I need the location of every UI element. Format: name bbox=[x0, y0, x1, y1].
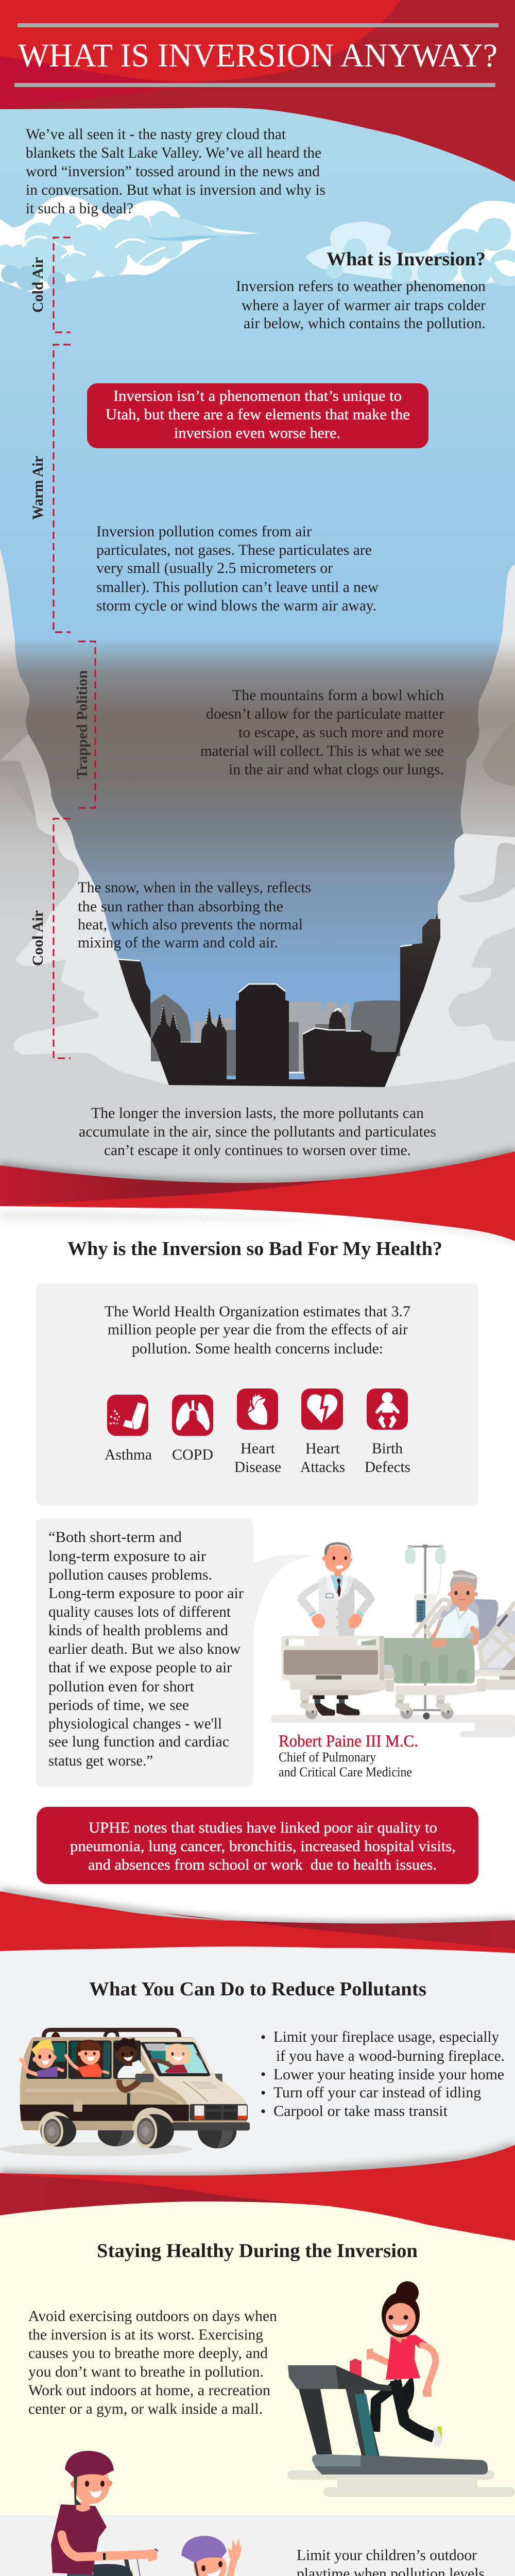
pollutants section background bbox=[0, 1942, 515, 2179]
distant light buildings bbox=[193, 1002, 350, 1073]
heading: what is inversion: What is Inversion? bbox=[327, 249, 486, 270]
panel: who estimate and health concerns: Defects bbox=[365, 1459, 410, 1476]
bracket: warm air bbox=[54, 345, 71, 632]
title bottom rule bbox=[14, 83, 495, 87]
panel: doctor quote: physiological changes - we'll bbox=[48, 1715, 222, 1732]
text: particulates: particulates, not gases. These particulates are bbox=[96, 541, 372, 558]
callout: unique to utah: Utah, but there are a few elements that make the bbox=[106, 406, 410, 423]
heading: why so bad: Why is the Inversion so Bad For My Health? bbox=[67, 1238, 442, 1260]
callout: uphe studies bbox=[37, 1807, 478, 1884]
label: cold air: Cold Air bbox=[29, 257, 46, 313]
intro text: blankets the Salt Lake Valley. We’ve all heard the bbox=[26, 144, 321, 161]
runner bbox=[401, 2375, 414, 2411]
text: children advice: Limit your children’s outdoor bbox=[297, 2547, 477, 2564]
text: particulates: storm cycle or wind blows the warm air away. bbox=[96, 597, 376, 614]
bullet list bbox=[261, 2028, 505, 2120]
son bbox=[181, 2536, 284, 2576]
bracket: cool air bbox=[54, 819, 71, 1058]
illustration: father and son on bicycles bbox=[0, 2451, 312, 2576]
text: exercise advice: Work out indoors at home, a recreation bbox=[28, 2382, 270, 2399]
text: particulates: smaller). This pollution can’t leave until a new bbox=[96, 579, 379, 596]
father bbox=[20, 2451, 178, 2576]
bullet list: Limit your fireplace usage, especially bbox=[273, 2028, 499, 2045]
panel: doctor quote: see lung function and cardiac bbox=[48, 1733, 229, 1750]
kid: brunette bbox=[66, 2040, 109, 2077]
inversion definition: air below, which contains the pollution. bbox=[244, 315, 486, 332]
illustration: family van bbox=[0, 2030, 250, 2156]
white health section background bbox=[0, 1195, 515, 1927]
windshield bbox=[140, 2042, 210, 2076]
label: warm air: Warm Air bbox=[29, 456, 46, 520]
text: exercise advice bbox=[28, 2308, 277, 2417]
bullet list: if you have a wood-burning fireplace. bbox=[276, 2047, 505, 2064]
text: mountains bowl: to escape, as such more and more bbox=[238, 724, 444, 741]
panel: who estimate and health concerns: Asthma bbox=[105, 1446, 152, 1463]
text: exercise advice: the inversion is at its worst. Exercising bbox=[28, 2326, 263, 2343]
intro text: in conversation. But what is inversion and why is bbox=[26, 181, 325, 198]
bracket: cold air bbox=[54, 238, 71, 332]
doctor name and title: Robert Paine III M.C. bbox=[279, 1732, 418, 1751]
panel: who estimate and health concerns: million people per year die from the effects of air bbox=[108, 1321, 408, 1338]
inversion definition bbox=[236, 278, 486, 332]
panel: doctor quote: Long-term exposure to poor air bbox=[48, 1585, 244, 1602]
driver bbox=[151, 2044, 203, 2073]
rear leg bbox=[375, 2383, 399, 2432]
red wave divider 3 bbox=[0, 2141, 515, 2241]
text: exercise advice: you don’t want to breathe in pollution. bbox=[28, 2363, 264, 2380]
cloud left bbox=[0, 195, 260, 293]
bullet list: Turn off your car instead of idling bbox=[273, 2084, 481, 2101]
icon: lungs bbox=[172, 1395, 213, 1436]
text: snow: mixing of the warm and cold air. bbox=[78, 934, 278, 951]
text: mountains bowl: doesn’t allow for the particulate matter bbox=[206, 705, 444, 722]
callout: uphe studies: UPHE notes that studies have linked poor air quality to bbox=[89, 1819, 437, 1836]
kid: blond bbox=[19, 2039, 64, 2077]
text: mountains bowl: The mountains form a bowl which bbox=[232, 687, 444, 704]
bed footboard and frame bbox=[282, 1636, 515, 1696]
header band bbox=[0, 0, 515, 185]
illustration: doctor and patient at bedside bbox=[271, 1542, 515, 1737]
panel: who estimate and health concerns: COPD bbox=[172, 1446, 213, 1463]
doctor bbox=[297, 1542, 375, 1716]
text: particulates: very small (usually 2.5 micrometers or bbox=[96, 560, 333, 577]
doctor name and title bbox=[279, 1732, 418, 1780]
text: exercise advice: Avoid exercising outdoors on days when bbox=[28, 2308, 277, 2325]
heading: staying healthy: Staying Healthy During the Inversion bbox=[97, 2240, 418, 2262]
floor bbox=[271, 1715, 515, 1737]
panel: doctor quote: earlier death. But we also know bbox=[48, 1640, 241, 1657]
staying healthy section background bbox=[0, 2179, 515, 2515]
mirrors bbox=[135, 2074, 154, 2082]
panel: who estimate and health concerns: Disease bbox=[234, 1459, 281, 1476]
callout: unique to utah bbox=[87, 383, 428, 448]
rear wheels bbox=[98, 2120, 134, 2146]
intro text: word “inversion” tossed around in the news and bbox=[26, 163, 320, 180]
panel: who estimate and health concerns: The World Health Organization estimates that 3.7 bbox=[105, 1303, 410, 1320]
intro text: We’ve all seen it - the nasty grey cloud that bbox=[26, 126, 286, 143]
roof rack bbox=[44, 2030, 179, 2037]
city skyline bbox=[118, 913, 440, 1087]
red wave divider 1 bbox=[0, 1148, 515, 1245]
panel: doctor quote: pollution even for short bbox=[48, 1678, 195, 1695]
label: trapped polition: Trapped Polition bbox=[74, 670, 91, 779]
icon: heart bbox=[237, 1388, 278, 1430]
cloud right bbox=[305, 201, 515, 286]
panel: who estimate and health concerns: Attacks bbox=[300, 1459, 345, 1476]
bracket: trapped pollution bbox=[78, 641, 95, 808]
sky and smog background bbox=[0, 108, 515, 1185]
label: cool air: Cool Air bbox=[29, 910, 46, 966]
panel: who estimate and health concerns: Heart bbox=[305, 1440, 340, 1457]
panel: doctor quote: status get worse.” bbox=[48, 1752, 153, 1769]
red wave divider 2 bbox=[0, 1887, 515, 1953]
panel: who estimate and health concerns: Birth bbox=[372, 1440, 403, 1457]
callout: uphe studies: and absences from school or work due to health issues. bbox=[88, 1856, 437, 1873]
passenger bbox=[114, 2038, 146, 2090]
text: longer inversion: can’t escape it only continues to worsen over time. bbox=[104, 1142, 411, 1159]
body bbox=[20, 2037, 247, 2130]
title: WHAT IS INVERSION ANYWAY? bbox=[18, 37, 497, 74]
grey buildings bbox=[151, 994, 400, 1076]
treadmill uprights bbox=[299, 2389, 332, 2454]
doctor name and title: Chief of Pulmonary bbox=[279, 1750, 376, 1765]
floor under treadmill bbox=[287, 2470, 515, 2497]
side towers and temple bbox=[118, 913, 440, 1087]
bullet list: Lower your heating inside your home bbox=[273, 2066, 504, 2083]
panel: doctor quote: pollution causes problems. bbox=[48, 1566, 212, 1583]
panel: doctor quote: “Both short-term and bbox=[48, 1529, 182, 1546]
intro text bbox=[26, 126, 325, 217]
panel: doctor quote: periods of time, we see bbox=[48, 1697, 189, 1714]
text: exercise advice: center or a gym, or walk inside a mall. bbox=[28, 2400, 263, 2417]
icon: asthma inhaler bbox=[107, 1395, 148, 1436]
panel: doctor quote bbox=[36, 1518, 317, 1787]
shadow bbox=[0, 2142, 192, 2156]
panel: who estimate and health concerns: pollution. Some health concerns include: bbox=[132, 1340, 383, 1357]
text: snow: The snow, when in the valleys, reflects bbox=[78, 879, 311, 896]
intro text: it such a big deal? bbox=[26, 200, 133, 217]
doctor name and title: and Critical Care Medicine bbox=[279, 1765, 412, 1780]
text: snow bbox=[78, 879, 311, 951]
inversion definition: where a layer of warmer air traps colder bbox=[242, 297, 486, 314]
front wheels bbox=[38, 2111, 75, 2131]
central tower bbox=[236, 984, 289, 1079]
illustration: woman on treadmill bbox=[288, 2281, 488, 2475]
text: exercise advice: causes you to breathe more deeply, and bbox=[28, 2345, 268, 2362]
grey bicycle section background bbox=[0, 2515, 515, 2576]
text: particulates: Inversion pollution comes from air bbox=[96, 523, 312, 540]
water bottle bbox=[350, 2359, 362, 2377]
panel: who estimate and health concerns: Heart bbox=[241, 1440, 276, 1457]
hood bbox=[135, 2038, 247, 2105]
text: children advice bbox=[297, 2547, 500, 2576]
bullet list: Carpool or take mass transit bbox=[273, 2103, 448, 2120]
treadmill deck bbox=[312, 2454, 488, 2475]
windows bbox=[26, 2041, 67, 2079]
callout: unique to utah: inversion even worse here. bbox=[174, 425, 340, 442]
inversion definition: Inversion refers to weather phenomenon bbox=[236, 278, 486, 295]
text: mountains bowl: in the air and what clogs our lungs. bbox=[229, 761, 444, 778]
text: particulates bbox=[96, 523, 379, 614]
callout: unique to utah: Inversion isn’t a phenomenon that’s unique to bbox=[113, 387, 402, 404]
blanket bbox=[383, 1638, 475, 1683]
panel: doctor quote: kinds of health problems and bbox=[48, 1622, 228, 1639]
mountains bbox=[0, 548, 515, 1195]
text: mountains bowl: material will collect. This is what we see bbox=[200, 742, 444, 759]
text: snow: the sun rather than absorbing the bbox=[78, 898, 283, 915]
panel: doctor quote: that if we expose people to air bbox=[48, 1659, 232, 1676]
icon: baby bbox=[367, 1388, 408, 1430]
text: longer inversion: The longer the inversion lasts, the more pollutants can bbox=[91, 1105, 424, 1122]
heading: reduce pollutants: What You Can Do to Reduce Pollutants bbox=[89, 1978, 426, 2000]
text: mountains bowl bbox=[200, 687, 444, 778]
title top rule bbox=[18, 23, 499, 27]
wheels bbox=[300, 1690, 453, 1719]
bed rear rails and mattress bbox=[413, 1599, 515, 1680]
treadmill console bbox=[288, 2365, 338, 2389]
callout: uphe studies: pneumonia, lung cancer, bronchitis, increased hospital visits, bbox=[70, 1838, 456, 1855]
iv stand bbox=[405, 1545, 445, 1719]
panel: who estimate and health concerns bbox=[36, 1283, 478, 1505]
panel: doctor quote: long-term exposure to air bbox=[48, 1548, 206, 1565]
patient bbox=[433, 1570, 479, 1645]
panel: doctor quote: quality causes lots of different bbox=[48, 1603, 231, 1620]
text: longer inversion: accumulate in the air, since the pollutants and particulates bbox=[79, 1123, 436, 1140]
text: snow: heat, which also prevents the normal bbox=[78, 916, 303, 933]
text: longer inversion bbox=[79, 1105, 436, 1159]
icon: broken heart bbox=[301, 1388, 343, 1430]
stripe bbox=[20, 2105, 189, 2121]
